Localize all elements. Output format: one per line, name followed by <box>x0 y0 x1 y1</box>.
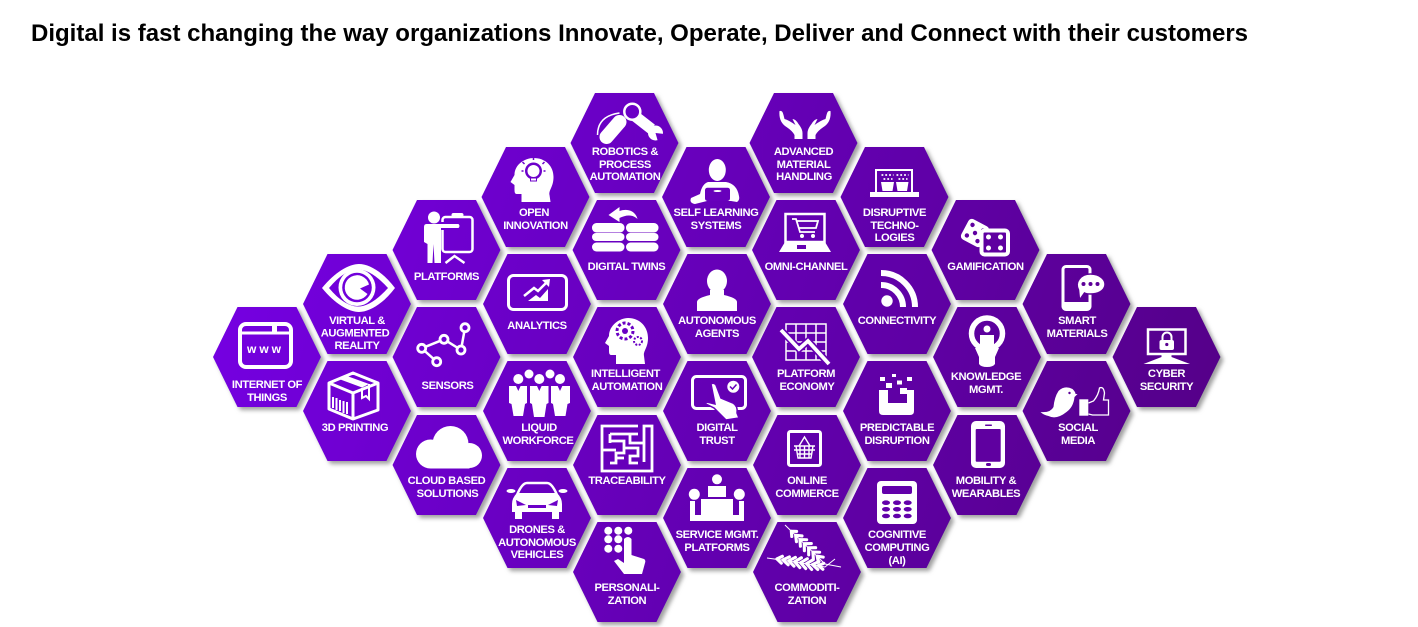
label: LOGIES <box>875 232 915 244</box>
label: ANALYTICS <box>507 320 568 332</box>
hexagon: disruptive technologies <box>840 147 948 247</box>
label: COGNITIVE <box>868 529 927 541</box>
label: OPEN <box>519 207 549 219</box>
label: SENSORS <box>422 380 474 392</box>
hexagon: analytics <box>483 254 591 354</box>
hexagon: gamification <box>932 200 1040 300</box>
label: WEARABLES <box>952 488 1021 500</box>
label: DISRUPTION <box>864 435 930 447</box>
label: LIQUID <box>521 422 557 434</box>
icon: person at laptop <box>690 159 739 204</box>
label: AUTONOMOUS <box>678 315 757 327</box>
icon: presenter at board <box>424 212 472 263</box>
icon: twin databases <box>592 207 658 252</box>
icon: tablet with basket <box>788 432 820 466</box>
icon: tablet with tapping hand <box>692 376 746 420</box>
hexagon: self learning systems <box>662 147 770 247</box>
label: SELF LEARNING <box>674 207 759 219</box>
label: COMMERCE <box>775 488 840 500</box>
label: CONNECTIVITY <box>858 315 937 327</box>
hexagon: digital trust <box>663 361 771 461</box>
icon: browser window: www <box>246 342 284 356</box>
icon: wheat <box>767 525 841 571</box>
title: Digital is fast changing the way organizations Innovate, Operate, Deliver and Connect with their customers <box>31 20 1248 47</box>
icon: tablet device <box>971 421 1005 468</box>
label: ZATION <box>788 595 827 607</box>
label: HANDLING <box>776 171 833 183</box>
hexagon: omni-channel <box>752 200 860 300</box>
label: ZATION <box>608 595 647 607</box>
icon: container and pixels <box>879 374 914 415</box>
icon: group of people <box>509 370 570 417</box>
icon: laptop with plant pots <box>870 170 919 197</box>
label: THINGS <box>247 392 288 404</box>
label: PLATFORM <box>777 368 835 380</box>
label: TRACEABILITY <box>588 475 667 487</box>
label: MEDIA <box>1061 435 1095 447</box>
label: PLATFORMS <box>684 542 751 554</box>
label: CLOUD BASED <box>408 475 486 487</box>
icon: people around table <box>689 474 745 521</box>
hexagon: platform economy <box>752 307 860 407</box>
hexagon: online commerce <box>753 415 861 515</box>
label: COMPUTING <box>865 542 930 554</box>
label: DRONES & <box>509 524 565 536</box>
label: (AI) <box>888 555 906 567</box>
label: SERVICE MGMT. <box>676 529 759 541</box>
label: COMMODITI- <box>775 582 840 594</box>
hexagon: predictable disruption <box>843 361 951 461</box>
label: KNOWLEDGE <box>951 371 1022 383</box>
label: REALITY <box>334 340 380 352</box>
label: PERSONALI- <box>594 582 660 594</box>
icon: cloud <box>416 426 482 468</box>
icon: keypad and hand <box>604 527 645 574</box>
hexagon: personalization <box>573 522 681 622</box>
icon: head with light bulb <box>510 158 554 202</box>
hexagon: virtual and augmented reality <box>303 254 411 354</box>
hexagon: cyber security <box>1112 307 1220 407</box>
label: CYBER <box>1148 368 1185 380</box>
icon: chart on screen <box>508 276 566 310</box>
hexagon: smart materials <box>1022 254 1130 354</box>
label: SOCIAL <box>1058 422 1098 434</box>
icon: signal waves <box>881 273 915 307</box>
label: MOBILITY & <box>956 475 1017 487</box>
label: VEHICLES <box>511 549 564 561</box>
label: INTELLIGENT <box>591 368 661 380</box>
label: GAMIFICATION <box>947 261 1024 273</box>
label: 3D PRINTING <box>322 422 389 434</box>
label: DISRUPTIVE <box>863 207 927 219</box>
hexagon: autonomous agents <box>663 254 771 354</box>
label: OMNI-CHANNEL <box>765 261 848 273</box>
icon: bird and thumbs up <box>1040 387 1108 417</box>
icon: person bust <box>697 270 737 311</box>
label: PROCESS <box>599 159 652 171</box>
icon: phone with speech bubble <box>1063 266 1105 310</box>
hexagon: robotics and process automation <box>570 93 678 193</box>
hexagon: connectivity <box>843 254 951 354</box>
label: PLATFORMS <box>414 271 480 283</box>
icon: car <box>506 483 568 519</box>
hexagon: drones and autonomous vehicles <box>483 468 591 568</box>
label: ADVANCED <box>774 146 834 158</box>
icon: monitor with padlock <box>1144 330 1190 364</box>
label: ROBOTICS & <box>592 146 658 158</box>
label: AUTONOMOUS <box>498 537 577 549</box>
label: WORKFORCE <box>503 435 574 447</box>
icon: robot arm <box>598 104 664 140</box>
label: ECONOMY <box>779 381 835 393</box>
label: AUTOMATION <box>590 171 661 183</box>
icon: maze <box>602 426 652 471</box>
label: PREDICTABLE <box>860 422 935 434</box>
label: AGENTS <box>695 328 740 340</box>
hexagon: open innovation <box>482 147 590 247</box>
label: DIGITAL TWINS <box>588 261 666 273</box>
hexagon: service management platforms <box>663 468 771 568</box>
icon: dice <box>959 217 1008 254</box>
icon: head with gears <box>605 318 648 364</box>
icon: laptop with cart <box>779 214 831 252</box>
label: MATERIALS <box>1047 328 1108 340</box>
label: DIGITAL <box>696 422 738 434</box>
label: SECURITY <box>1140 381 1194 393</box>
icon: falling chart <box>781 324 829 364</box>
label: SYSTEMS <box>691 220 742 232</box>
hexagon: liquid workforce <box>483 361 591 461</box>
hexagon: commoditization <box>753 522 861 622</box>
hexagon: cloud based solutions <box>392 415 500 515</box>
label: MGMT. <box>969 384 1003 396</box>
label: INTERNET OF <box>232 379 303 391</box>
icon: cupped hands <box>779 111 831 139</box>
label: TECHNO- <box>870 220 919 232</box>
icon: connected nodes <box>418 324 469 366</box>
hexagon: social media <box>1022 361 1130 461</box>
label: ONLINE <box>787 475 828 487</box>
hexagon: cognitive computing <box>843 468 951 568</box>
hexagon: digital twins <box>572 200 680 300</box>
hexagon: intelligent automation <box>573 307 681 407</box>
label: SMART <box>1058 315 1096 327</box>
hexagon: internet of things <box>213 307 321 407</box>
label: TRUST <box>699 435 735 447</box>
label: MATERIAL <box>777 159 831 171</box>
label: VIRTUAL & <box>329 315 385 327</box>
label: AUTOMATION <box>592 381 663 393</box>
hexagon: knowledge management <box>933 307 1041 407</box>
hexagon: advanced material handling <box>750 93 858 193</box>
icon: bulb with person <box>972 318 1002 367</box>
icon: calculator <box>877 481 917 524</box>
hexagon: traceability <box>573 415 681 515</box>
icon: box <box>329 373 378 419</box>
hexagon: 3D printing <box>303 361 411 461</box>
label: INNOVATION <box>503 220 568 232</box>
hexagon: sensors <box>392 307 500 407</box>
label: SOLUTIONS <box>417 488 479 500</box>
hexagon: platforms <box>392 200 500 300</box>
hexagon: mobility and wearables <box>933 415 1041 515</box>
label: AUGMENTED <box>321 328 390 340</box>
icon: eye <box>322 264 395 312</box>
